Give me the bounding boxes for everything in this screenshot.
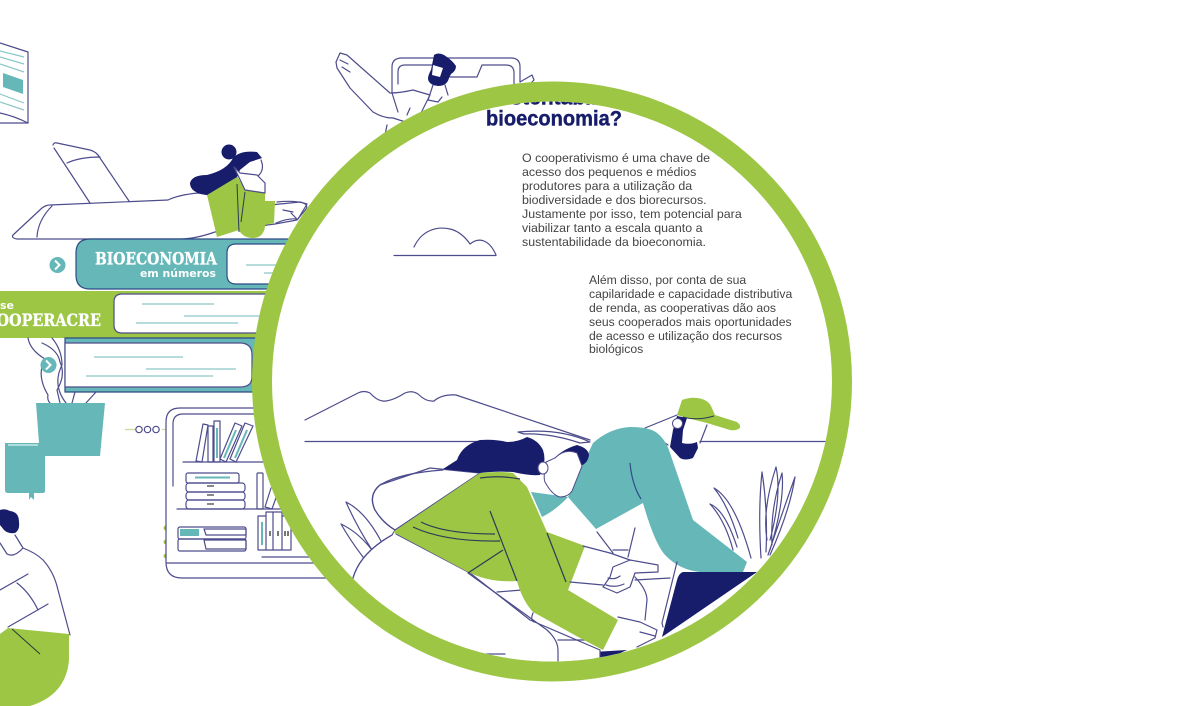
text block: paragraph 2: Além disso, por conta de sua [589, 273, 746, 287]
icon: cloud [394, 228, 496, 256]
text: se: se [0, 299, 14, 312]
pagination dots [125, 426, 184, 433]
magnifier lens: white circle with green ring [262, 92, 842, 672]
icon: open notebook [0, 43, 28, 123]
text block: paragraph 1: O cooperativismo é uma chave de [522, 151, 710, 165]
person: man pointing behind laptop, top [336, 53, 534, 135]
text block: paragraph 1: viabilizar tanto a escala quanto a [522, 221, 703, 235]
heading: sustentabilidade [486, 86, 652, 110]
icon: chevron button bottom [40, 357, 56, 373]
person: man with hat in teal shirt [518, 398, 747, 572]
heading [487, 102, 621, 126]
icon: chevron button top [50, 257, 66, 273]
book: se COOPERACRE [0, 291, 320, 338]
magnifier content clipped to lens [305, 86, 826, 700]
person: man sitting bottom-left [0, 509, 70, 706]
text block: paragraph 1: biodiversidade e dos biorecursos. [522, 193, 707, 207]
hand: pointing [570, 528, 670, 647]
laptop [593, 562, 757, 664]
text block: paragraph 2: de acesso e utilização dos recursos [589, 329, 782, 343]
text block: paragraph 2: de renda, as cooperativas dão aos [589, 301, 776, 315]
icon: teal closed book [5, 443, 45, 500]
text block: paragraph 2: capilaridade e capacidade distributiva [589, 287, 792, 301]
plants right [710, 467, 795, 558]
text block: paragraph 1: produtores para a utilização da [522, 179, 692, 193]
text: BIOECONOMIA: BIOECONOMIA [95, 250, 218, 270]
plants left [341, 502, 382, 557]
bookshelf [164, 408, 340, 578]
book: BIOECONOMIA em números [76, 239, 320, 289]
text block: paragraph 1: Justamente por isso, tem potencial para [522, 207, 742, 221]
person: woman lying on books with laptop [12, 143, 307, 239]
text block: paragraph 2: biológicos [589, 342, 643, 356]
text block: paragraph 2: seus cooperados mais oportunidades [589, 315, 792, 329]
background illustration: left side [0, 43, 534, 706]
text: em números: em números [140, 267, 216, 280]
landscape: mountain and horizon [305, 392, 826, 442]
person: woman in green shirt [352, 437, 671, 662]
text block: paragraph 1: sustentabilidade da bioeconomia. [522, 235, 706, 249]
plant with pot [28, 338, 105, 456]
book: third with white cover [65, 338, 320, 392]
heading: bioeconomia? [486, 108, 622, 130]
text block: paragraph 1: acesso dos pequenos e médios [522, 165, 696, 179]
